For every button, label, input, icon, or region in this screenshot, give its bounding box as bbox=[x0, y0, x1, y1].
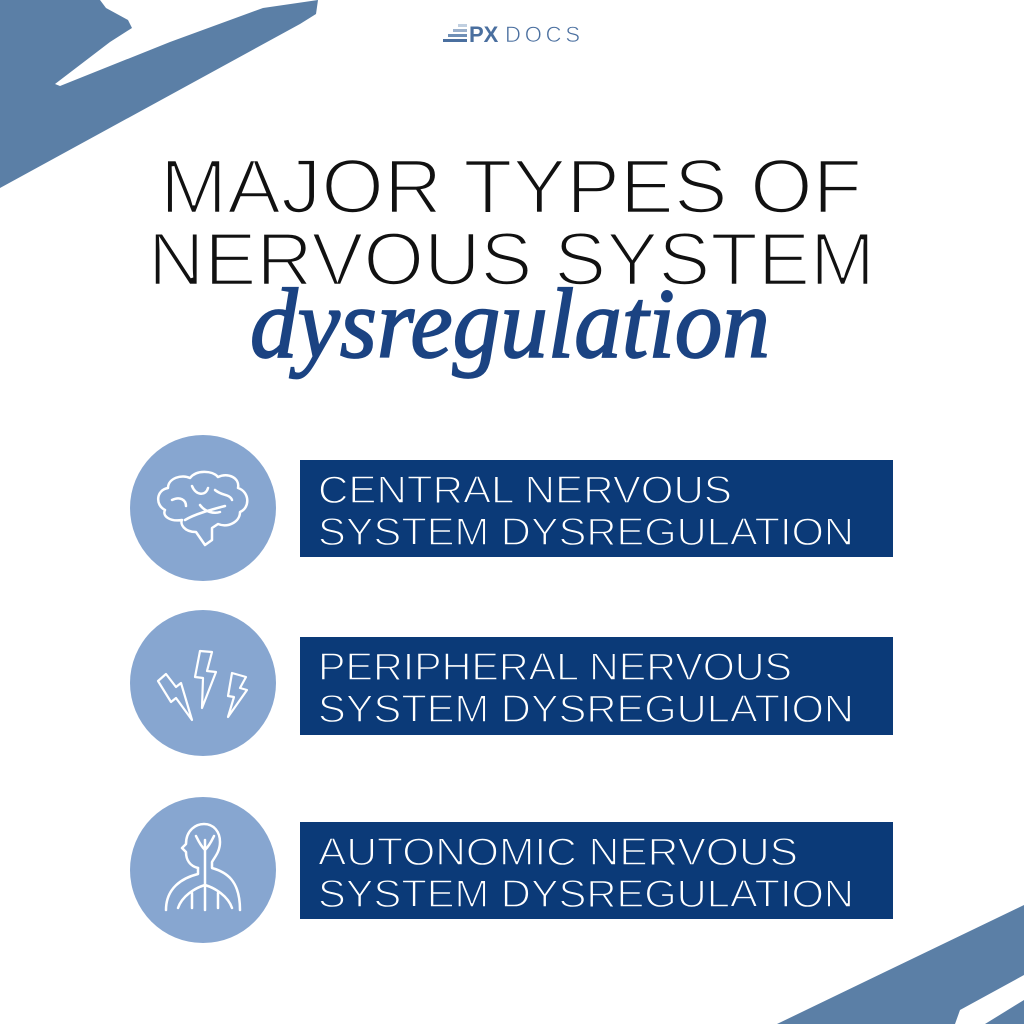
label box: SYSTEM DYSREGULATION bbox=[318, 873, 854, 916]
icon: human nervous system bbox=[130, 797, 276, 943]
label box: SYSTEM DYSREGULATION bbox=[318, 511, 854, 554]
title: dysregulation bbox=[250, 268, 770, 379]
icon: lightning bolts bbox=[130, 610, 276, 756]
label box: SYSTEM DYSREGULATION bbox=[318, 688, 854, 731]
title bbox=[148, 144, 875, 379]
logo bbox=[443, 22, 580, 47]
label box bbox=[300, 637, 893, 735]
item 2: peripheral bbox=[130, 610, 893, 756]
title: MAJOR TYPES OF bbox=[160, 144, 862, 230]
icon: brain bbox=[130, 435, 276, 581]
logo: DOCS bbox=[505, 22, 580, 47]
label box: PERIPHERAL NERVOUS bbox=[318, 646, 792, 689]
title: NERVOUS SYSTEM bbox=[148, 217, 875, 301]
logo: PX bbox=[469, 22, 499, 47]
label box bbox=[300, 460, 893, 557]
label box: CENTRAL NERVOUS bbox=[318, 469, 732, 512]
item 1: central bbox=[130, 435, 893, 581]
item 3: autonomic bbox=[130, 797, 893, 943]
brush stroke bottom-right bbox=[777, 905, 1024, 1024]
brush stroke top-left bbox=[0, 0, 318, 188]
label box bbox=[300, 822, 893, 919]
label box: AUTONOMIC NERVOUS bbox=[318, 831, 798, 874]
